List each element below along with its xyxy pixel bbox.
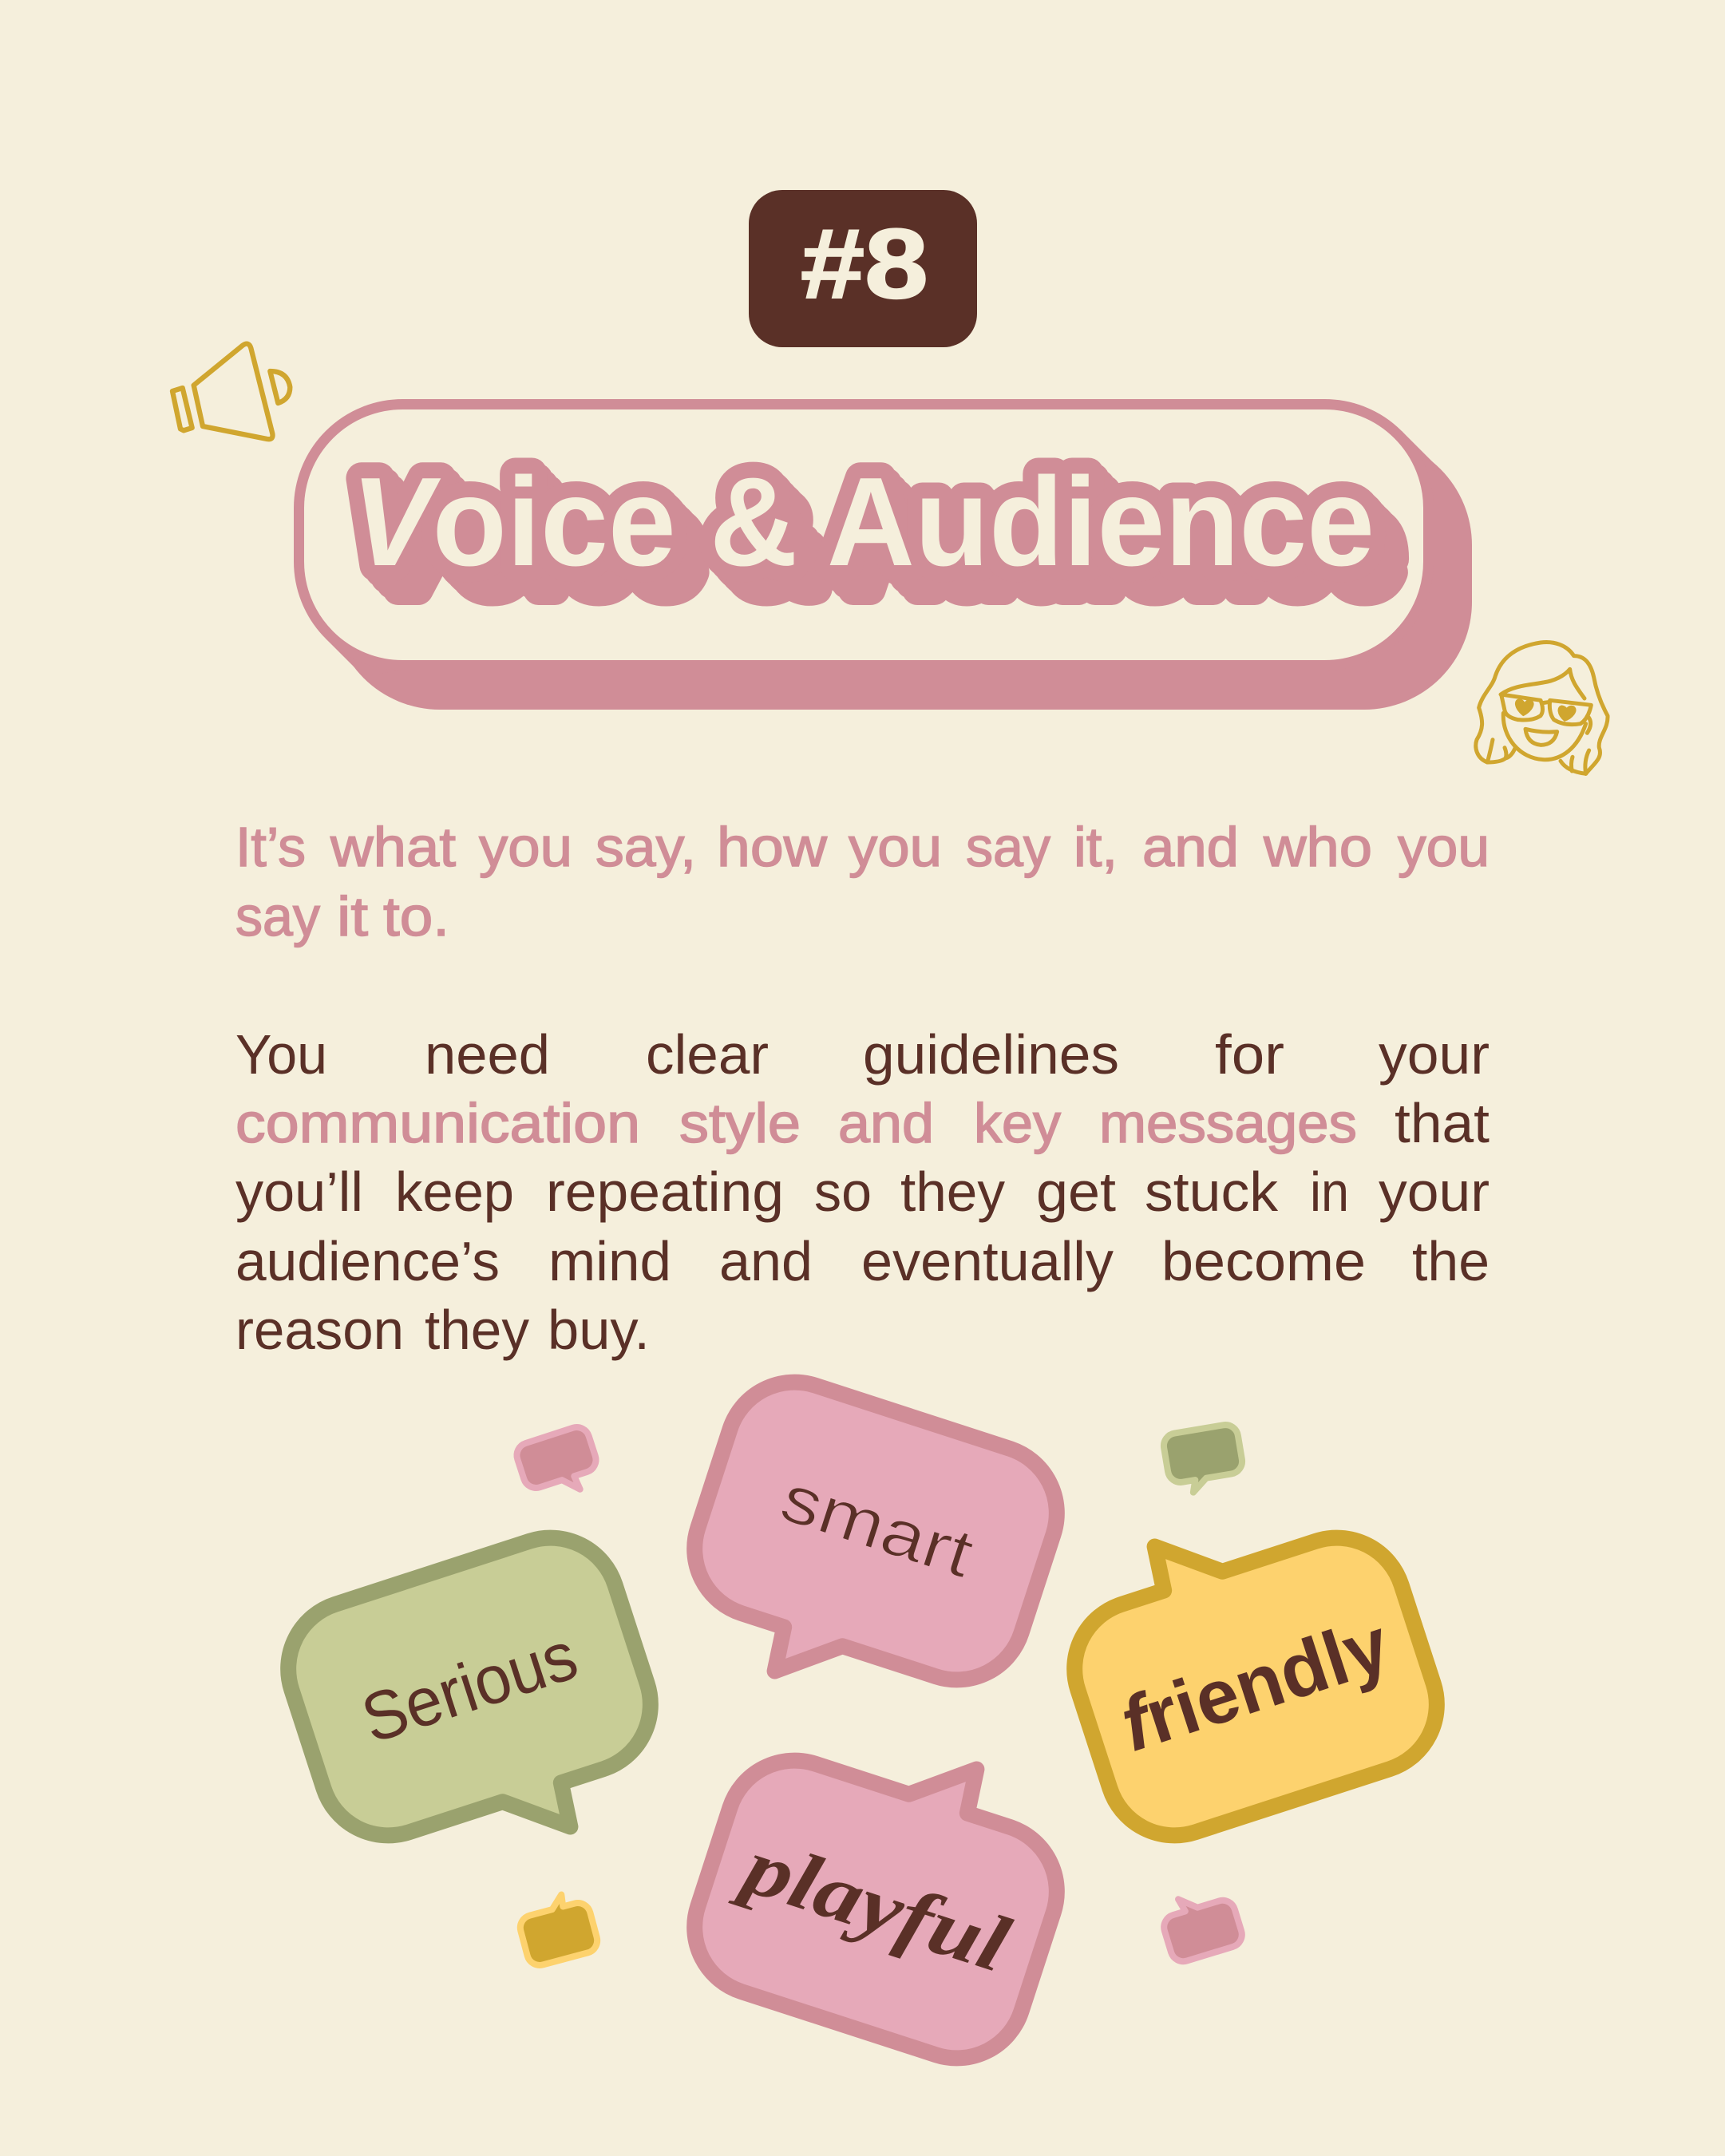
speech bubble: smart (663, 1365, 1074, 1740)
body paragraph (235, 1023, 1490, 1361)
intro statement: it, (1074, 816, 1118, 878)
icon: megaphone (172, 344, 290, 439)
small bubble: green top (1162, 1423, 1246, 1496)
small bubble: yellow bottom (514, 1889, 600, 1968)
body paragraph: you’ll (235, 1161, 363, 1223)
body paragraph: for (1215, 1023, 1284, 1086)
intro statement: how (717, 816, 827, 878)
intro statement: It’s (235, 816, 306, 878)
intro statement: it (337, 885, 368, 947)
intro statement: say (235, 885, 320, 947)
body paragraph: messages (1099, 1092, 1357, 1154)
body paragraph: repeating (546, 1161, 784, 1223)
number badge: #8 (801, 209, 928, 319)
body paragraph: and (838, 1092, 934, 1154)
body paragraph: guidelines (863, 1023, 1119, 1086)
intro statement: you (849, 816, 942, 878)
body paragraph: the (1412, 1230, 1490, 1292)
speech bubble: smart: smart (773, 1460, 983, 1592)
intro statement: and (1142, 816, 1239, 878)
body paragraph: reason (235, 1299, 404, 1361)
body paragraph: so (814, 1161, 872, 1223)
body paragraph: and (719, 1230, 813, 1292)
speech bubble: Serious (271, 1521, 682, 1896)
speech bubble: playful: playful (727, 1819, 1020, 1989)
small bubble: pink bottom (1157, 1885, 1245, 1964)
speech bubble: Serious: Serious (353, 1617, 586, 1758)
body paragraph: become (1161, 1230, 1366, 1292)
body paragraph: need (425, 1023, 550, 1086)
title pill: Voice & Audience (299, 404, 1472, 710)
small bubble: pink top (513, 1424, 603, 1505)
body paragraph: that (1395, 1092, 1490, 1154)
body paragraph: mind (548, 1230, 671, 1292)
body paragraph: eventually (861, 1230, 1114, 1292)
body paragraph: get (1036, 1161, 1116, 1223)
icon: woman with heart glasses (1476, 642, 1608, 773)
title text: Voice & Audience (351, 452, 1375, 592)
intro statement: say (966, 816, 1050, 878)
body paragraph: they (900, 1161, 1005, 1223)
intro statement: to. (383, 885, 449, 947)
body paragraph: clear (646, 1023, 769, 1086)
speech bubble: friendly: friendly (1111, 1601, 1399, 1768)
intro statement: you (479, 816, 572, 878)
body paragraph: stuck (1145, 1161, 1279, 1223)
body paragraph: style (679, 1092, 801, 1154)
body paragraph: they (425, 1299, 529, 1361)
intro statement: say, (595, 816, 696, 878)
intro statement (235, 816, 1490, 947)
speech bubble: friendly (1043, 1478, 1454, 1853)
number badge (749, 190, 977, 347)
intro statement: you (1398, 816, 1490, 878)
body paragraph: keep (395, 1161, 514, 1223)
body paragraph: your (1379, 1023, 1490, 1086)
body paragraph: buy. (548, 1299, 650, 1361)
body paragraph: key (974, 1092, 1061, 1154)
body paragraph: You (235, 1023, 327, 1086)
body paragraph: communication (235, 1092, 640, 1154)
speech bubble: playful (677, 1700, 1088, 2075)
body paragraph: your (1379, 1161, 1490, 1223)
body paragraph: in (1310, 1161, 1349, 1223)
intro statement: who (1263, 816, 1372, 878)
body paragraph: audience’s (235, 1230, 500, 1292)
intro statement: what (330, 816, 456, 878)
